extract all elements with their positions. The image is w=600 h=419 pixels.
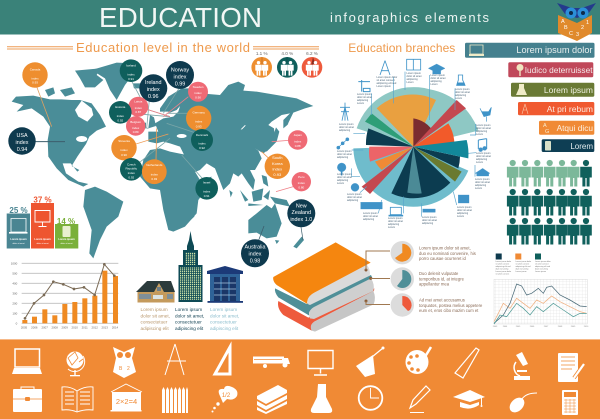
line chart with legend: adipiscing elit sed [535,265,550,268]
building captions: dolor sit amet, [175,313,204,318]
marker: Canada [22,62,48,88]
percent circles: male/female: 6.2 % [306,51,318,56]
pie callout captions: adipiscing [347,199,359,202]
marker: Ireland [139,74,167,102]
column and line chart: 2008 [52,326,58,330]
pie callout captions: Lorem ipsum [475,178,489,181]
building captions: consectetuer [175,320,202,325]
line chart with legend: 2005 [516,326,521,328]
bars: 25, 37, 14 percent: dolor sit amet [36,242,49,245]
marker: Japan: Japan [294,133,302,137]
line chart with legend: 2007 [544,326,549,328]
pie descriptions: torquatos, postea melius appetere [419,303,483,308]
line chart with legend: diam nonummy [496,268,508,270]
column and line chart: 500 [12,272,18,276]
icon: owl logo on book: C [569,31,573,37]
line chart with legend: sit amet consect [496,272,510,276]
pie descriptions [419,246,483,313]
buildings [136,231,243,303]
marker: Belgium: Belgium [130,120,142,124]
column and line chart: 400 [12,282,18,286]
column and line chart: 200 [12,302,18,306]
percent circles: male/female: 4.0 % [281,51,293,56]
percent circles: male/female: 1.1 % [256,51,268,56]
icon: thought bubble: 1/2 [222,393,231,399]
building captions: dolor sit amet, [210,313,239,318]
ribbon: atqui dicu: Atqui dicu [557,123,593,133]
title: EDUCATION [99,2,262,33]
icon: owl logo on book: 1 [586,20,589,26]
pie callout captions: dolor sit amet [337,176,352,179]
ribbon: lorem: Lorem [570,142,593,151]
marker: Ireland: Ireland [145,80,162,86]
column and line chart: 1000 [11,262,18,266]
marker: Australia [241,226,269,267]
pie callout captions: Lorem [357,102,364,105]
column and line chart: 2011 [82,326,88,330]
marker: Norway [166,61,194,89]
marker: Peru: 0.80 [298,186,305,190]
marker: Germany: 0.93 [196,124,202,128]
pie descriptions: appellantur mea [419,282,450,286]
line chart with legend: 2008 [558,326,563,328]
pie callout captions: adipiscing [422,222,434,225]
marker: New Zealand: Zealand [292,210,311,216]
stacked books [273,242,375,332]
pie descriptions: temporibus id, at integre [419,276,465,281]
marker: USA: USA [16,133,28,139]
ribbon: lorem ipsum [511,83,594,97]
pie callout captions: Lorem ipsum [357,93,371,96]
marker: Latvia: 0.87 [135,110,142,114]
callout connectors from books [366,251,390,304]
marker: Germany: Germany [193,110,205,114]
pie callout captions: adipiscing [475,184,487,187]
marker: Belgium [126,116,145,136]
icon: calculator [562,390,578,415]
pie callout captions: Lorem [476,133,483,136]
bars: 25, 37, 14 percent [7,196,78,248]
marker: Iceland: Iceland [126,64,136,68]
marker: Denmark: 0.92 [199,146,205,150]
pie callout captions: Lorem ipsum [455,88,469,91]
bars: 25, 37, 14 percent: dolor sit amet [12,242,25,245]
pie callout captions: Lorem ipsum [363,212,377,215]
marker: Slovenia: index [120,148,128,152]
pie callout captions: Lorem [457,215,464,218]
bars: 25, 37, 14 percent: Lorem ipsum [58,237,75,241]
marker: Australia: index [249,252,262,258]
pie descriptions: Lorem ipsum dolor sit amet, [419,246,471,250]
ribbon: atqui dicu [539,121,594,135]
leader lines [35,80,293,192]
pie callout captions: Lorem [430,83,438,86]
pie callout captions: Lorem ipsum [457,206,471,209]
icon: owl logo on book: 3 [576,32,579,38]
pie callout captions: dolor sit amet [476,155,491,158]
heading: education level in the world: Education level in the world [76,40,250,55]
pie callout captions: Lorem ipsum [430,74,445,77]
icon: owl logo on book: B [564,25,568,31]
icon: clock [359,386,382,410]
pie callout captions [337,72,491,229]
icon: open book [62,387,93,412]
marker: Sweden: Sweden [193,85,204,89]
pie callout captions: dolor sit amet [357,96,372,99]
marker: Czech Republic [120,158,143,181]
marker: Israel: 0.91 [204,194,210,198]
bars: 25, 37, 14 percent: 25 % [9,206,28,215]
line chart with legend: 2003 [493,326,498,328]
marker: Estonia: Estonia [115,105,126,109]
pie callout captions: dolor sit amet [388,220,403,223]
pie callout captions: dolor sit amet [347,196,362,199]
marker: Sweden [188,82,208,102]
pie callout captions: dolor sit amet [363,215,378,218]
column and line chart: 2014 [112,326,119,330]
pie callout captions: Lorem ipsum [347,193,361,196]
pie callout captions: sit amet consect [376,79,395,82]
icon: owl [113,347,136,378]
icon: pencil [410,386,430,412]
marker: Denmark [191,129,213,151]
pie callout captions: dolor sit amet [337,153,352,156]
pie callout captions: Lorem ipsum [388,217,402,220]
icon: owl: 2 [127,366,130,372]
pie callout captions: Lorem ipsum [339,123,353,126]
pie callout connectors [352,72,476,217]
icon: chalkboard: 2×2=4 [116,397,137,406]
line chart with legend: 2004 [503,326,508,328]
marker: Norway: 0.99 [175,82,185,88]
marker: Denmark: index [198,142,206,146]
marker: Japan: 0.88 [295,144,301,148]
marker: Slovenia [111,135,137,160]
pie descriptions: eum et, eros cibo mazim cum et [419,308,479,313]
ribbon: lorem ipsum dolor: Lorem ipsum dolor [516,45,592,55]
icon: graduation cap [453,390,485,409]
pie callout captions: Lorem [475,187,482,190]
building captions: consectetuer [210,320,237,325]
line chart with legend: adipiscing elit sed [496,265,510,268]
marker: Netherlands: Netherlands [146,163,163,167]
icon: palette [406,347,431,374]
marker: New Zealand: index 1.0 [290,217,312,223]
world map [12,63,313,258]
line chart with legend: sit amet consect [496,262,510,266]
ribbon: iudico deterruisset: Iudico deterruisset [525,65,593,75]
marker: Czech Republic: Republic [125,166,138,170]
pie icon: red [391,293,414,317]
pie callout captions: adipiscing elit sed [376,82,397,85]
line chart with legend: diam nonummy [535,268,548,270]
bars: 25, 37, 14 percent: 37 % [33,196,52,204]
pie callout captions: dolor sit amet [430,77,446,80]
column and line chart: 100 [12,312,18,316]
icon: owl: B [119,366,123,372]
pie descriptions: Ad mei amet accusamus [419,298,465,302]
pie callout captions: dolor sit amet [455,91,470,94]
marker: Peru: Peru [298,175,305,179]
pie callout captions: Lorem [388,226,395,229]
ribbon: lorem ipsum dolor [465,43,594,58]
icon: owl logo on book: A [561,19,565,25]
pie callout captions: Lorem [476,161,483,164]
pictogram: people rows [507,160,592,244]
building captions: adipiscing elit [210,326,239,331]
marker: Estonia: 0.92 [117,118,124,122]
pie callout captions: adipiscing [388,223,400,226]
building captions: Lorem ipsum [140,307,168,312]
column and line chart: 0 [16,322,18,326]
building captions: adipiscing elit [140,326,169,331]
marker: Sweden: 0.90 [195,96,201,100]
marker: South Korea [265,154,290,179]
pie callout captions: Lorem ipsum [337,150,351,153]
pie icon: orange [391,241,414,264]
marker: USA: 0.94 [17,147,27,153]
line chart with legend: Lorem ipsum dolor [516,260,532,263]
icon: chalkboard [110,384,142,412]
icon: globe [66,352,85,376]
pie callout icons [337,59,491,216]
marker: Czech Republic: Czech [127,162,136,166]
pie callout captions: dolor sit amet [476,127,491,130]
marker: South Korea: 0.93 [273,172,282,177]
column and line chart: 2012 [92,326,98,330]
line chart with legend: 2010 [584,326,589,328]
bars: 25, 37, 14 percent: 14 % [57,217,75,226]
icon: pencils [162,387,188,413]
marker: Slovenia: Slovenia [118,139,130,143]
marker: Israel [195,177,218,200]
building captions [140,307,239,331]
marker: Netherlands: 0.93 [151,177,158,181]
pie callout captions: dolor sit amet [406,75,422,78]
pie callout captions: Lorem ipsum [376,85,391,88]
line chart with legend: Lorem ipsum [535,270,546,273]
pie callout captions: Lorem ipsum [476,124,490,127]
pie callout captions: Lorem [406,81,414,84]
icon: briefcase [13,387,42,412]
marker: Canada: index [31,76,39,80]
line chart with legend: Lorem ipsum dolor [496,260,512,263]
pie callout captions: adipiscing [339,129,351,132]
pie callout captions: Lorem ipsum dolor [376,76,397,79]
marker: Australia: Australia [245,244,265,250]
ribbon: iudico deterruisset [508,62,593,77]
icon: school bus [253,356,290,368]
pie callout captions: dolor sit amet [475,181,490,184]
line chart with legend: sit amet consect [535,262,549,266]
pie callout captions: adipiscing [337,179,349,182]
column and line chart: 2013 [102,326,108,330]
marker: South Korea: Korea [272,161,283,166]
line chart with legend [493,254,589,328]
pie callout captions: dolor sit amet [457,209,472,212]
icon: microscope [514,352,530,380]
line chart with legend: Lorem ipsum dolor [496,270,512,273]
marker: Canada: Canada [30,68,41,72]
marker: New Zealand [287,199,315,227]
marker: Germany: index [195,120,203,124]
marker: Netherlands: index [151,172,158,176]
pie callout captions: adipiscing [430,80,442,83]
line chart with legend: 2009 [571,326,576,328]
pie callout captions: adipiscing [337,156,349,159]
icon: owl logo on book [557,3,596,41]
icon: laptop [12,349,42,374]
icon: mouse [507,393,537,415]
marker: Belgium: 0.89 [133,130,139,134]
marker: Belgium: index [132,126,140,130]
pie callout captions: adipiscing [357,99,369,102]
building captions: consectetuer [140,320,168,325]
marker: Norway: index [174,74,187,80]
column and line chart: 300 [12,292,18,296]
marker: Iceland: index [127,72,135,76]
pie descriptions: Duo delenit vulputate [419,271,459,276]
line chart with legend: adipiscing elit sed [516,265,530,268]
column and line chart [11,262,119,330]
marker: Japan [288,130,307,150]
pie callout captions: Lorem ipsum [476,152,490,155]
radial pie chart [353,87,478,207]
bars: 25, 37, 14 percent: dolor sit amet [60,242,73,245]
percent circles: male/female [251,51,322,78]
pie callout captions: adipiscing [406,78,418,81]
icon: bell [356,346,384,377]
building captions: adipiscing elit [175,326,204,331]
marker: Canada: 0.93 [32,80,38,84]
marker: Latvia: Latvia [134,100,143,104]
marker: Peru [292,172,311,191]
line chart with legend: sit amet consect [516,262,530,266]
pie callout captions: Lorem [455,97,462,100]
marker: Ireland: 0.96 [148,94,159,100]
marker: Germany [186,106,211,131]
marker: Israel: Israel [203,180,211,184]
pie callout captions: adipiscing [457,212,469,215]
pie descriptions: porro causae ocurreret id [419,256,466,261]
icon: flask [311,384,332,413]
column and line chart: 2006 [31,326,38,330]
marker: Estonia: index [117,114,124,118]
column and line chart: 2010 [72,326,78,330]
marker: USA: index [16,140,29,146]
pie callout captions: Lorem ipsum [422,216,436,219]
ribbon: at pri rebum [518,102,594,115]
marker: Israel: index [203,190,211,194]
icon: book stack [257,385,287,414]
pie callout captions: Lorem ipsum [406,72,421,75]
icon: ruler [455,348,479,378]
marker: Peru: index [298,181,305,185]
icon: monitor [308,350,333,375]
marker: Ireland: index [147,87,160,93]
pie callout captions: adipiscing [476,130,488,133]
marker: Latvia [128,97,148,117]
pie callout captions: adipiscing [455,94,467,97]
icon: notebook [558,353,584,382]
marker: Australia: 0.98 [250,258,260,264]
marker: Denmark: Denmark [196,133,209,137]
column and line chart: 2009 [62,326,68,330]
marker: Netherlands [142,159,167,184]
building captions: Lorem ipsum [175,307,202,312]
column and line chart: 2005 [21,326,28,330]
marker: New Zealand: New [296,204,307,210]
ribbon: at pri rebum: At pri rebum [547,104,593,114]
subtitle: infographics elements [330,10,490,25]
line chart with legend: 2006 [530,326,535,328]
pie callout captions: Lorem [337,182,344,185]
icon: owl logo on book: 2 [581,25,584,31]
footer icon band [0,339,600,419]
line chart with legend: Lorem ipsum [516,270,527,273]
column and line chart: 2007 [42,326,48,330]
pie callout captions: dolor sit amet [339,126,354,129]
marker: Sweden: index [194,91,202,95]
icon: compass [165,344,186,375]
marker: South Korea: South [272,155,283,160]
marker: Estonia [109,101,132,124]
pie icon: teal [391,267,414,291]
marker: Czech Republic: index [128,171,135,175]
pie descriptions: duo eu nominati convenire, his [419,251,476,256]
header band [0,0,600,34]
line chart with legend: diam nonummy [516,268,528,270]
ribbon: atqui dicu: G [545,129,549,135]
line chart with legend: Lorem ipsum dolor [535,260,551,263]
pie callout captions: Lorem ipsum [337,173,351,176]
marker: Japan: index [294,140,302,144]
marker: South Korea: index [273,166,282,172]
heading: education branches: Education branches [348,41,455,55]
building captions: Lorem ipsum [210,307,237,312]
ribbon: atqui dicu: A [543,123,547,129]
marker: USA [8,127,36,155]
marker: Latvia: index [135,106,142,110]
icon: set square [215,347,230,374]
pie callout captions: dolor sit amet [422,219,437,222]
marker: Norway: Norway [171,68,189,74]
marker: Iceland [120,59,142,82]
bars: 25, 37, 14 percent: Lorem ipsum [10,237,27,241]
ribbon: lorem [542,139,594,152]
bars: 25, 37, 14 percent: Lorem ipsum [34,237,51,241]
marker: Czech Republic: 0.92 [128,176,135,180]
marker: Iceland: 0.91 [128,77,134,81]
icon: thought bubble [212,386,237,412]
ribbon: lorem ipsum: Lorem ipsum [544,85,593,95]
pie callout captions: adipiscing [363,218,375,221]
marker: Slovenia: 0.90 [121,153,127,157]
pie callout captions: adipiscing [476,158,488,161]
building captions: dolor sit amet, [140,313,170,318]
